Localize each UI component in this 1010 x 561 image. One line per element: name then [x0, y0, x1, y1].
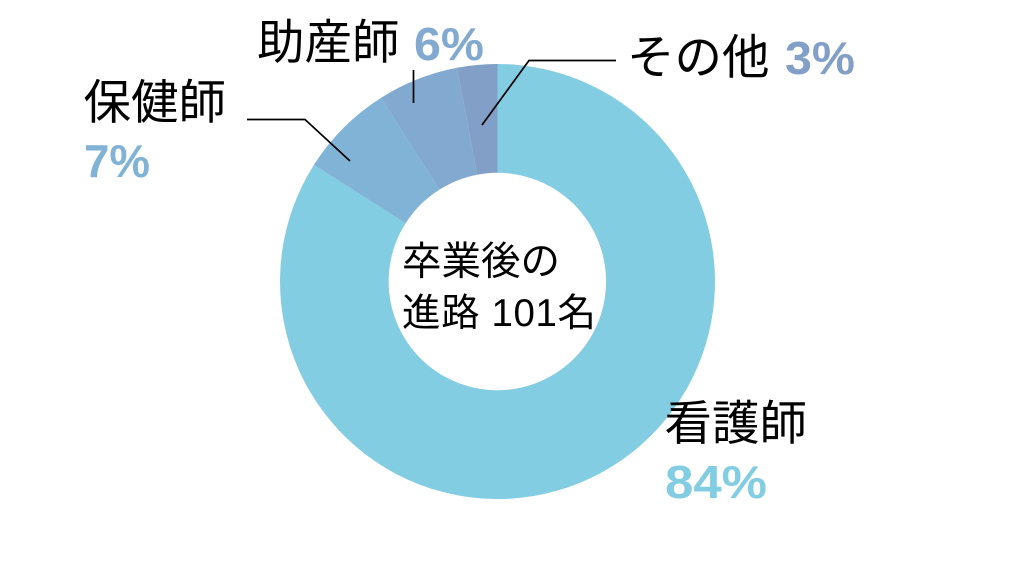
- label: その他 3%: その他: [627, 32, 770, 85]
- label: 看護師 84%: 84%: [665, 456, 767, 508]
- label: その他 3%: [627, 32, 855, 85]
- leader line: その他: [482, 60, 616, 125]
- label: 看護師 84%: 看護師: [664, 398, 807, 451]
- label: 助産師 6%: [257, 17, 484, 70]
- center label: 卒業後の: [402, 240, 560, 284]
- leader line: 助産師: [412, 70, 414, 103]
- slice: 保健師 7%: [314, 98, 439, 223]
- label: 助産師 6%: 6%: [414, 18, 484, 70]
- slice: 助産師 6%: [381, 68, 477, 190]
- leader line: 保健師: [247, 120, 350, 161]
- center label: 進路 101名: [402, 292, 596, 335]
- label: その他 3%: 3%: [785, 32, 855, 84]
- center label: [402, 240, 596, 335]
- label: 助産師 6%: 助産師: [257, 17, 400, 70]
- label: 保健師 7%: 7%: [84, 135, 150, 187]
- label: 保健師 7%: 保健師: [84, 77, 226, 130]
- label: 保健師 7%: [84, 77, 226, 187]
- slice: その他 3%: [457, 64, 498, 175]
- label: 看護師 84%: [664, 398, 807, 508]
- slice: 看護師 84%: [280, 64, 715, 499]
- donut chart: [280, 64, 715, 499]
